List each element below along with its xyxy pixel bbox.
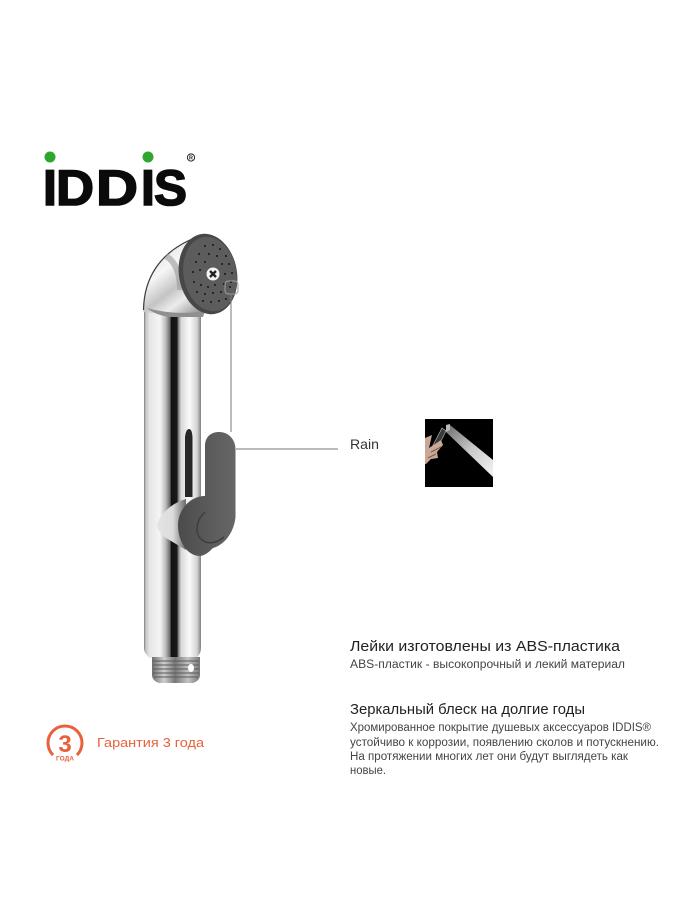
logo: IDDIS: D [96,160,138,216]
warranty badge: ГОДА [56,756,74,762]
leader line [231,294,338,449]
logo: IDDIS: S [154,160,187,216]
logo: IDDIS: D [56,160,94,216]
shower body [144,305,201,658]
warranty badge [48,726,82,762]
lever pivot cone [157,499,186,550]
shower head [172,229,244,319]
lever handle [178,432,236,556]
feature: mirror shine [350,702,659,777]
shower neck bend [144,237,205,317]
description: новые. [350,765,386,777]
logo: IDDIS: I [43,160,57,216]
description: На протяжении многих лет они будут выглядеть как [350,751,629,763]
warranty badge: 3 [58,731,72,758]
slot in body [185,429,192,497]
heading: Зеркальный блеск на долгие годы [350,702,585,718]
description: ABS-пластик - высокопрочный и лекий материал [350,659,625,671]
label: Rain: Rain [350,436,379,452]
product: hand shower [144,229,244,683]
description: Хромированное покрытие душевых аксессуаров IDDIS® [350,722,652,734]
warranty text: Гарантия 3 года [97,735,205,750]
description [350,722,659,777]
description: устойчиво к коррозии, появлению сколов и потускнению. [350,737,659,749]
logo: IDDIS: R [189,156,193,162]
feature: ABS plastic [350,639,625,671]
logo: IDDIS: I [141,160,155,216]
thread connector [152,657,200,683]
logo: IDDIS [43,152,195,216]
heading: Лейки изготовлены из ABS-пластика [350,639,621,655]
spray photo [425,419,493,487]
